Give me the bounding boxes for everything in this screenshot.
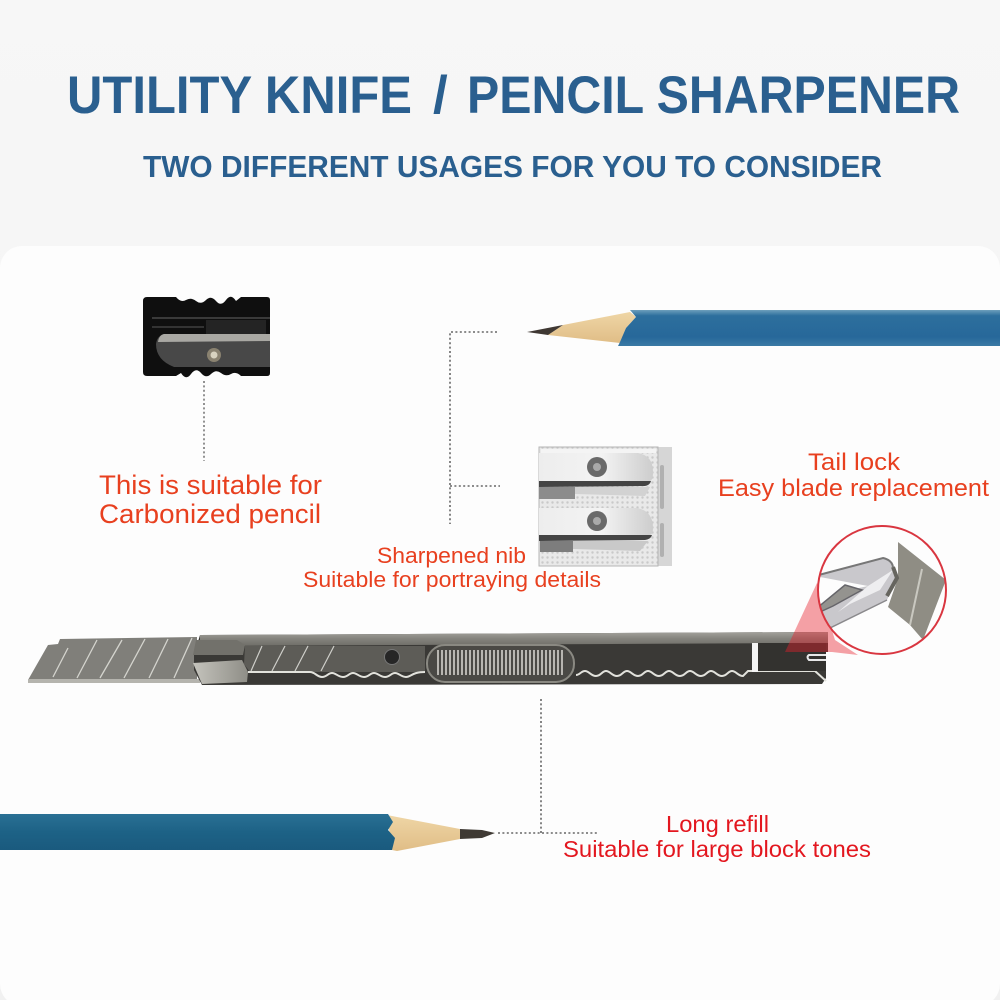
label: sharpened nib — [303, 543, 601, 592]
label: long refill — [563, 811, 871, 862]
title: / — [433, 66, 448, 125]
front clamp lower — [193, 660, 248, 684]
lock screw — [384, 650, 400, 664]
callout: red zoom cone — [785, 583, 858, 655]
knife handle — [194, 632, 828, 685]
label: tail lock: Easy blade replacement — [718, 475, 989, 502]
dotted leader: sharpened nib bracket — [450, 332, 500, 524]
subtitle: TWO DIFFERENT USAGES FOR YOU TO CONSIDER — [143, 149, 882, 184]
icon: upper pencil with sharp nib — [527, 310, 1000, 346]
title — [67, 66, 960, 125]
title: PENCIL SHARPENER — [467, 66, 960, 125]
front clamp upper — [193, 640, 245, 655]
label: sharpened nib: Suitable for portraying details — [303, 567, 601, 592]
handle top rail — [200, 632, 828, 646]
icon: lower pencil with blunt nib — [0, 814, 495, 851]
label: tail lock: Tail lock — [808, 449, 901, 476]
label: carbonized pencil: Carbonized pencil — [99, 499, 321, 529]
utility knife — [28, 632, 828, 685]
label: tail lock — [718, 449, 989, 502]
icon: black pencil sharpener — [143, 297, 270, 377]
wavy notch edge — [248, 671, 826, 681]
white content panel — [0, 246, 1000, 1000]
label: carbonized pencil: This is suitable for — [99, 470, 322, 500]
dotted leader: long refill — [498, 699, 597, 833]
label: carbonized pencil — [99, 470, 322, 529]
knife blade — [28, 637, 200, 683]
icon: double metal pencil sharpener — [539, 447, 672, 566]
callout: tail lock zoom circle — [815, 526, 946, 654]
handle window with blade segments — [244, 646, 425, 672]
slider thumb grip — [427, 645, 574, 682]
label: sharpened nib: Sharpened nib — [377, 543, 526, 568]
title: UTILITY KNIFE — [67, 66, 412, 125]
tail slot — [752, 643, 826, 672]
label: long refill: Suitable for large block tones — [563, 836, 871, 862]
dotted leader: black sharpener — [203, 381, 205, 461]
label: long refill: Long refill — [666, 811, 769, 837]
